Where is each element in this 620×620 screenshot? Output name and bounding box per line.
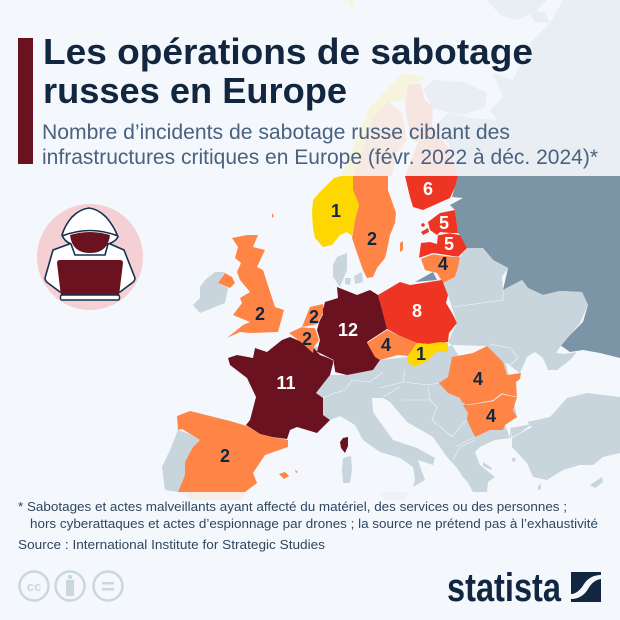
Turkey bbox=[512, 393, 620, 480]
title: russes en Europe bbox=[43, 70, 347, 111]
Poland count: 8 bbox=[412, 301, 422, 321]
Northern Ireland bbox=[218, 273, 235, 288]
Romania count: 4 bbox=[473, 369, 483, 389]
Balearic Islands bbox=[279, 470, 298, 479]
faded map behind the header bbox=[183, 0, 620, 500]
icon: creative commons badges bbox=[20, 572, 122, 600]
Kaliningrad bbox=[415, 272, 437, 282]
UK count: 2 bbox=[255, 304, 265, 324]
country incident counts bbox=[220, 179, 496, 466]
Norway count: 1 bbox=[331, 201, 341, 221]
Spain bbox=[177, 411, 288, 492]
footnote: hors cyberattaques et actes d’espionnage par drones ; la source ne prétend pas à l’exhaustivité bbox=[30, 517, 598, 531]
Netherlands bbox=[302, 304, 323, 327]
Estonian islands bbox=[421, 223, 429, 235]
Cyprus bbox=[590, 477, 603, 488]
Sweden count: 2 bbox=[367, 229, 377, 249]
icon: hooded hacker at a laptop bbox=[37, 204, 143, 310]
title accent bar bbox=[18, 38, 33, 164]
United Kingdom bbox=[227, 235, 284, 338]
Norway bbox=[312, 176, 359, 247]
Ireland bbox=[193, 272, 228, 313]
Latvia bbox=[419, 233, 467, 258]
Poland bbox=[378, 280, 457, 344]
Germany bbox=[317, 287, 387, 375]
title: Les opérations de sabotage bbox=[43, 31, 533, 72]
Latvia count: 5 bbox=[444, 234, 454, 254]
map of Europe bbox=[162, 176, 620, 492]
Finland bbox=[405, 176, 458, 210]
Corsica bbox=[340, 437, 348, 453]
Sweden bbox=[352, 176, 396, 278]
source: Source : International Institute for Strategic Studies bbox=[18, 538, 325, 552]
Romania bbox=[439, 346, 521, 405]
Shetland bbox=[272, 213, 274, 218]
Bulgaria bbox=[463, 394, 517, 437]
France count: 11 bbox=[276, 373, 296, 393]
Germany count: 12 bbox=[338, 320, 358, 340]
Estonia bbox=[428, 210, 458, 235]
Portugal bbox=[162, 430, 200, 492]
Denmark bbox=[333, 253, 363, 287]
Estonia count: 5 bbox=[439, 213, 449, 233]
France bbox=[228, 337, 334, 439]
Czech Republic count: 4 bbox=[381, 335, 391, 355]
borders bbox=[302, 233, 518, 460]
Slovakia bbox=[407, 342, 448, 367]
subtitle: infrastructures critiques en Europe (févr. 2022 à déc. 2024)* bbox=[42, 146, 598, 169]
footnote: * Sabotages et actes malveillants ayant affecté du matériel, des services ou des personnes ; bbox=[18, 500, 567, 514]
subtitle: Nombre d’incidents de sabotage russe ciblant des bbox=[42, 121, 510, 144]
Lithuania count: 4 bbox=[438, 254, 448, 274]
Czech Republic bbox=[367, 330, 417, 360]
central Europe, Italy and the Balkans bbox=[316, 345, 517, 492]
Belgium bbox=[289, 327, 319, 353]
Gotland bbox=[400, 241, 403, 252]
Luxembourg bbox=[314, 346, 320, 354]
Spain count: 2 bbox=[220, 446, 230, 466]
Russia bbox=[450, 176, 620, 358]
subtitle bbox=[42, 121, 598, 169]
Slovakia count: 1 bbox=[416, 344, 426, 364]
Bulgaria count: 4 bbox=[486, 406, 496, 426]
Statista logo: statista bbox=[447, 566, 562, 610]
Belgium count: 2 bbox=[302, 329, 312, 349]
Netherlands count: 2 bbox=[309, 307, 319, 327]
footnote bbox=[18, 500, 598, 531]
Belarus and Ukraine bbox=[443, 248, 588, 373]
title bbox=[43, 31, 533, 111]
Aegean islands bbox=[483, 458, 541, 490]
Finland count: 6 bbox=[423, 179, 433, 199]
icon: creative commons badges: cc bbox=[27, 579, 41, 594]
Sardinia bbox=[342, 456, 352, 483]
Lithuania bbox=[421, 254, 460, 283]
